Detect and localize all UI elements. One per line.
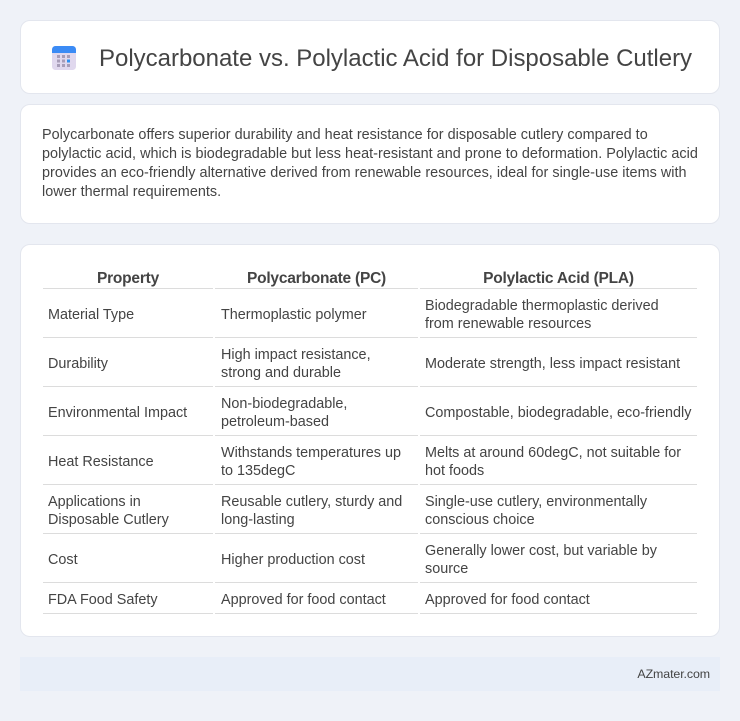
text block: summary: Polycarbonate offers superior durability and heat resistance for disposable cutlery compared to bbox=[42, 127, 648, 143]
title: Polycarbonate vs. Polylactic Acid for Disposable Cutlery bbox=[99, 45, 692, 72]
table: property comparison: petroleum-based bbox=[221, 414, 329, 430]
table: property comparison: conscious choice bbox=[425, 512, 535, 528]
table: property comparison: FDA Food Safety bbox=[48, 592, 158, 608]
table: property comparison: Material Type bbox=[48, 306, 134, 322]
table: property comparison: Disposable Cutlery bbox=[48, 512, 169, 528]
table: property comparison: to 135degC bbox=[221, 462, 295, 478]
table: property comparison: long-lasting bbox=[221, 512, 295, 528]
table: property comparison: hot foods bbox=[425, 462, 484, 478]
table: property comparison: Durability bbox=[48, 356, 108, 372]
table: property comparison: Compostable, biodegradable, eco-friendly bbox=[425, 404, 691, 420]
footer bbox=[20, 657, 720, 691]
table: property comparison bbox=[43, 270, 697, 614]
table: property comparison: High impact resistance, bbox=[221, 346, 371, 362]
table: property comparison: strong and durable bbox=[221, 364, 341, 380]
table: property comparison: Generally lower cost, but variable by bbox=[425, 542, 657, 558]
table: property comparison: Approved for food contact bbox=[221, 592, 386, 608]
table: property comparison: Cost bbox=[48, 552, 78, 568]
panel: comparison table bbox=[20, 244, 720, 637]
table: property comparison: Applications in bbox=[48, 494, 141, 510]
text block: summary: polylactic acid, which is biodegradable but less heat-resistant and prone to deformation. Polylactic acid bbox=[42, 146, 698, 162]
table: property comparison: Environmental Impact bbox=[48, 404, 187, 420]
table: property comparison: Biodegradable thermoplastic derived bbox=[425, 298, 659, 314]
table: property comparison: Moderate strength, less impact resistant bbox=[425, 356, 680, 372]
text block: summary: provides an eco-friendly alternative derived from renewable resources, ideal for single-use items with bbox=[42, 165, 687, 181]
table: property comparison: Higher production cost bbox=[221, 552, 365, 568]
panel: introduction bbox=[20, 104, 720, 224]
icon: calendar grid bbox=[52, 46, 76, 70]
table: property comparison: from renewable resources bbox=[425, 316, 591, 332]
table: property comparison: Heat Resistance bbox=[48, 454, 154, 470]
table: property comparison: source bbox=[425, 560, 468, 576]
text block: summary bbox=[42, 127, 698, 200]
table: property comparison: Single-use cutlery, environmentally bbox=[425, 494, 647, 510]
table: property comparison: Non-biodegradable, bbox=[221, 396, 347, 412]
panel: header bbox=[20, 20, 720, 94]
table: property comparison: Withstands temperatures up bbox=[221, 444, 401, 460]
footer credit: AZmater.com bbox=[637, 667, 710, 681]
text block: summary: lower thermal requirements. bbox=[42, 184, 221, 200]
table: property comparison: Polylactic Acid (PLA) bbox=[483, 270, 634, 287]
table: property comparison: Thermoplastic polymer bbox=[221, 306, 367, 322]
table: property comparison: Approved for food contact bbox=[425, 592, 590, 608]
table: property comparison: Reusable cutlery, sturdy and bbox=[221, 494, 402, 510]
table: property comparison: Melts at around 60degC, not suitable for bbox=[425, 444, 681, 460]
table: property comparison: Property bbox=[97, 270, 159, 287]
table: property comparison: Polycarbonate (PC) bbox=[247, 270, 386, 287]
